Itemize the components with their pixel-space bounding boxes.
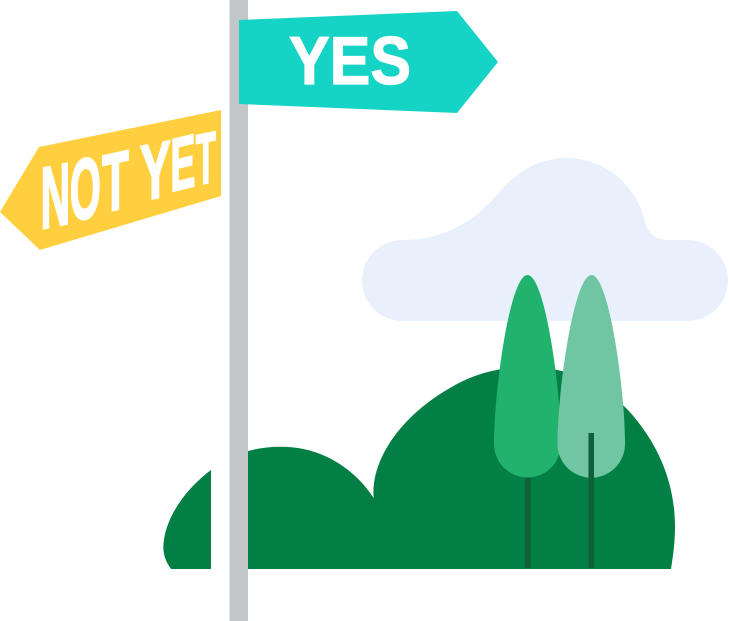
- gap in small hill: [211, 440, 230, 571]
- sign label: not yet: O: [70, 139, 101, 241]
- sign label: not yet: Y: [140, 123, 171, 218]
- tree trunk: right: [588, 433, 594, 568]
- sign board: yes: [239, 11, 498, 113]
- tree: left: [494, 275, 561, 477]
- sign label: yes: YES: [289, 23, 411, 99]
- tree: right: [558, 275, 625, 478]
- sign: yes: [239, 11, 498, 113]
- sign board: not yet: [0, 110, 221, 250]
- hill: large: [340, 367, 675, 569]
- sign label: not yet: E: [170, 118, 195, 208]
- cloud: [362, 158, 728, 321]
- hill: small: [163, 447, 380, 569]
- sign label: not yet: T: [102, 134, 129, 231]
- sign label: not yet: N: [41, 144, 70, 248]
- sign: not yet: [0, 110, 221, 250]
- sign label: not yet: T: [196, 116, 216, 201]
- signpost pole: [230, 0, 248, 621]
- sign label: not yet: [41, 116, 216, 248]
- tree trunk: left: [525, 470, 530, 568]
